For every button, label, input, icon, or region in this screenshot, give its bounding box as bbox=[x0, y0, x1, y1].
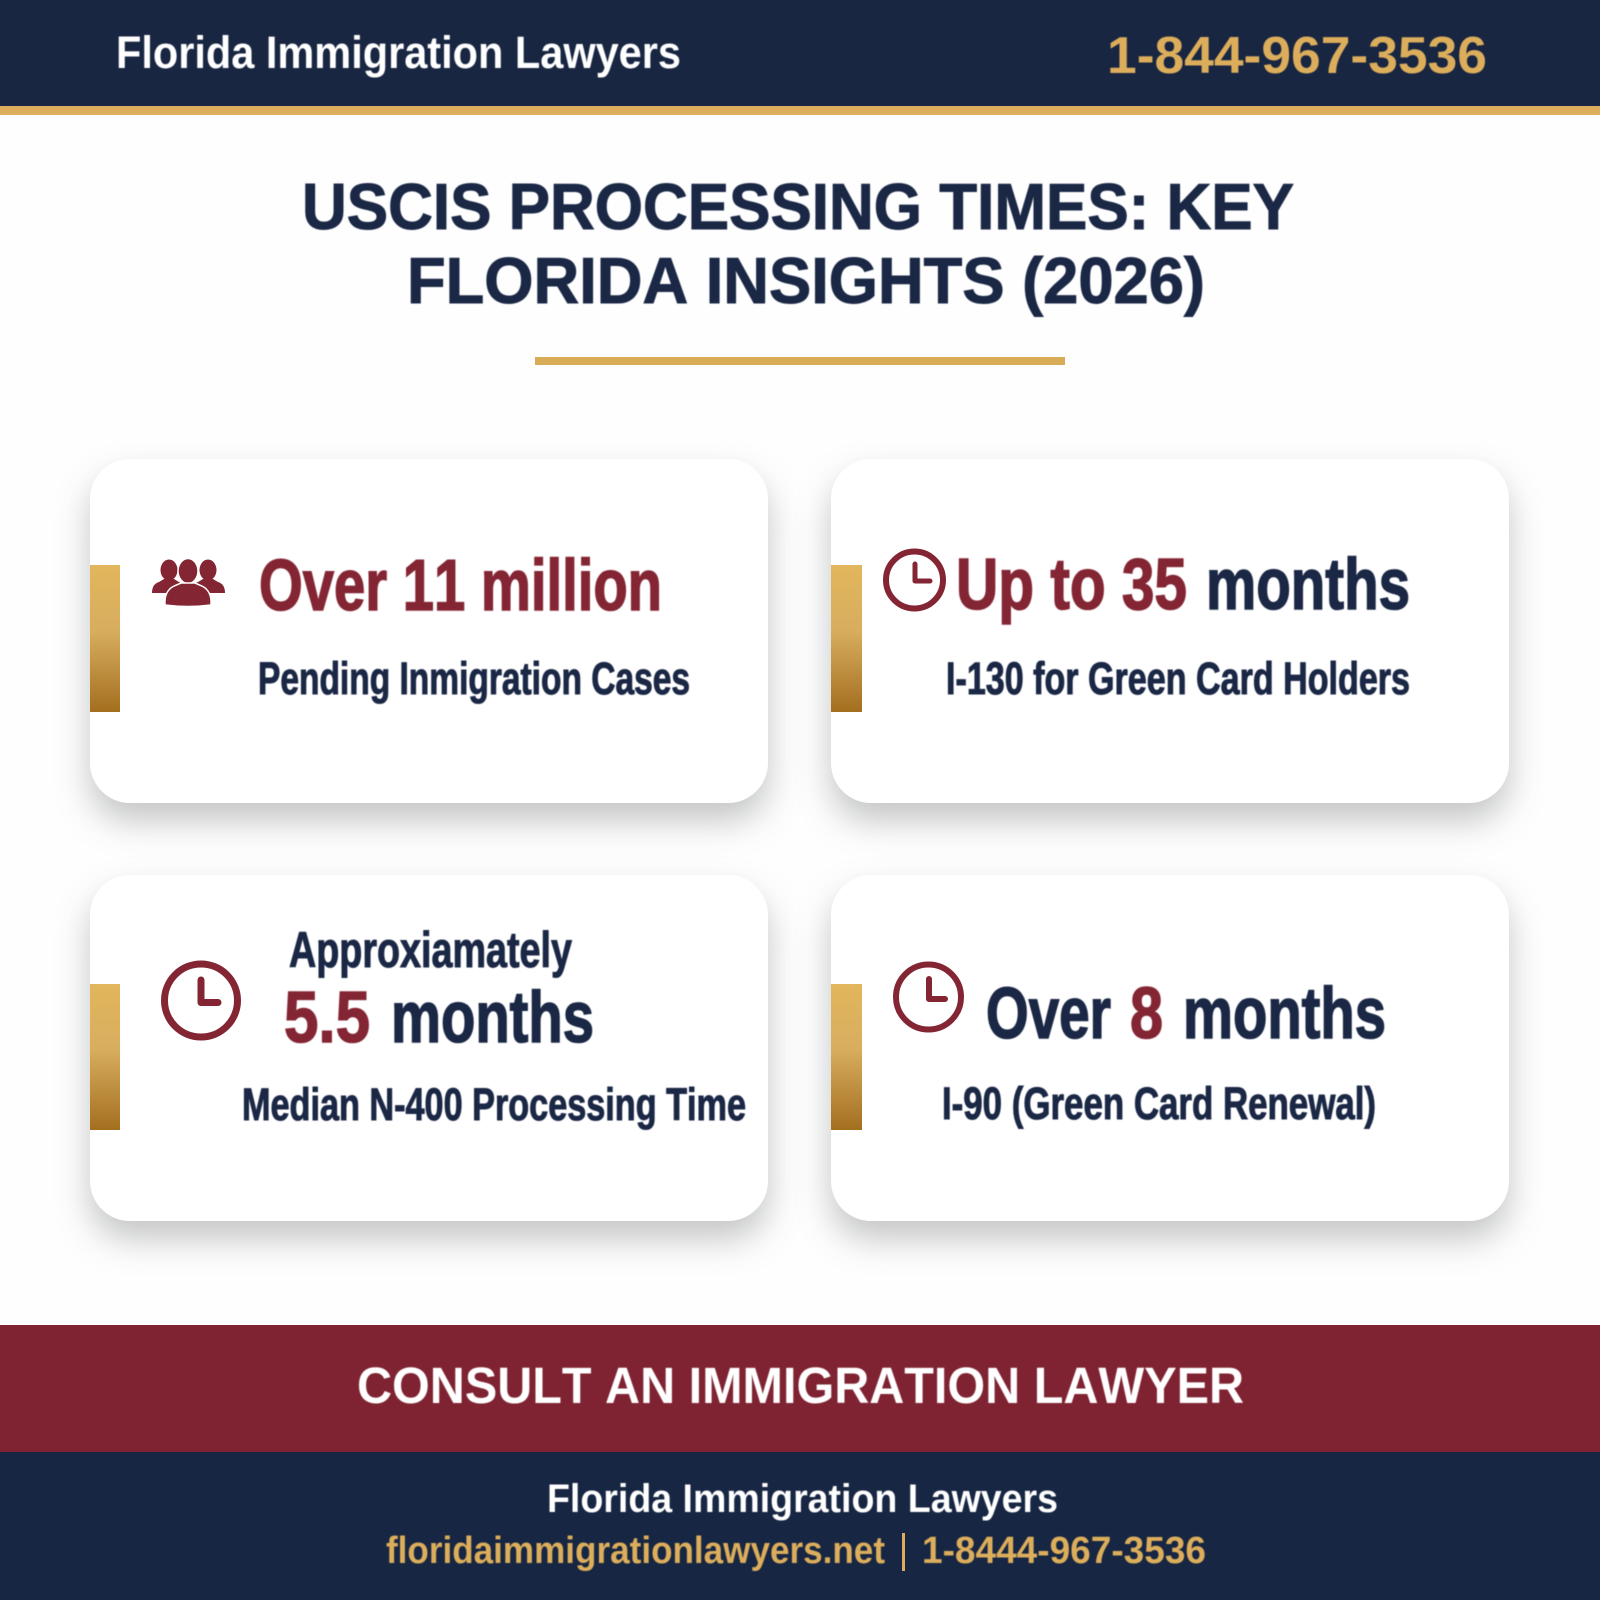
footer band bbox=[0, 1452, 1600, 1600]
stat: up to 35 months bbox=[956, 545, 1410, 625]
header firm name: Florida Immigration Lawyers bbox=[116, 27, 681, 78]
panel: I-130 bbox=[831, 459, 1509, 803]
gold accent bar bbox=[90, 984, 120, 1130]
header phone number: 1-844-967-3536 bbox=[1107, 27, 1487, 85]
icon: people bbox=[152, 558, 225, 606]
stat: 5.5 months: months bbox=[391, 978, 594, 1058]
gold accent bar bbox=[831, 984, 862, 1130]
icon: clock bbox=[164, 964, 238, 1037]
stat: 5.5 months: 5.5 bbox=[284, 978, 370, 1058]
label: I-90 green card renewal: I-90 (Green Card Renewal) bbox=[942, 1078, 1376, 1129]
label: pending immigration cases: Pending Inmigration Cases bbox=[258, 653, 690, 704]
label: median N-400 processing time: Median N-400 Processing Time bbox=[242, 1079, 746, 1130]
qualifier: approximately: Approxiamately bbox=[289, 922, 572, 978]
stat: over 8 months: Over bbox=[986, 974, 1111, 1054]
panel: N-400 bbox=[90, 875, 768, 1221]
title: USCIS PROCESSING TIMES: KEY bbox=[302, 170, 1294, 243]
stat: 5.5 months bbox=[284, 978, 594, 1058]
stat: up to 35 months: Up to 35 bbox=[956, 545, 1187, 625]
title divider bbox=[535, 357, 1065, 365]
footer firm name: Florida Immigration Lawyers bbox=[547, 1477, 1058, 1521]
panel: I-90 bbox=[831, 875, 1509, 1221]
gold accent bar bbox=[831, 565, 862, 712]
call to action band: CONSULT AN IMMIGRATION LAWYER bbox=[357, 1357, 1244, 1414]
header band bbox=[0, 0, 1600, 115]
footer contact line: 1-8444-967-3536 bbox=[922, 1530, 1206, 1572]
stat: over 8 months: 8 bbox=[1130, 974, 1163, 1054]
icon: clock bbox=[886, 552, 943, 608]
call to action band bbox=[0, 1325, 1600, 1452]
stat: over 8 months: months bbox=[1183, 974, 1386, 1054]
gold accent bar bbox=[90, 565, 120, 712]
footer contact line bbox=[386, 1530, 1206, 1572]
title bbox=[302, 170, 1294, 317]
panel: pending cases bbox=[90, 459, 768, 803]
stat: up to 35 months: months bbox=[1206, 545, 1410, 625]
title: FLORIDA INSIGHTS (2026) bbox=[407, 244, 1205, 317]
stat: over 8 months bbox=[986, 974, 1386, 1054]
footer contact line: floridaimmigrationlawyers.net bbox=[386, 1530, 885, 1572]
icon: clock bbox=[896, 964, 961, 1030]
stat: over 11 million: Over 11 million bbox=[259, 546, 662, 626]
label: I-130 for green card holders: I-130 for Green Card Holders bbox=[946, 653, 1410, 704]
